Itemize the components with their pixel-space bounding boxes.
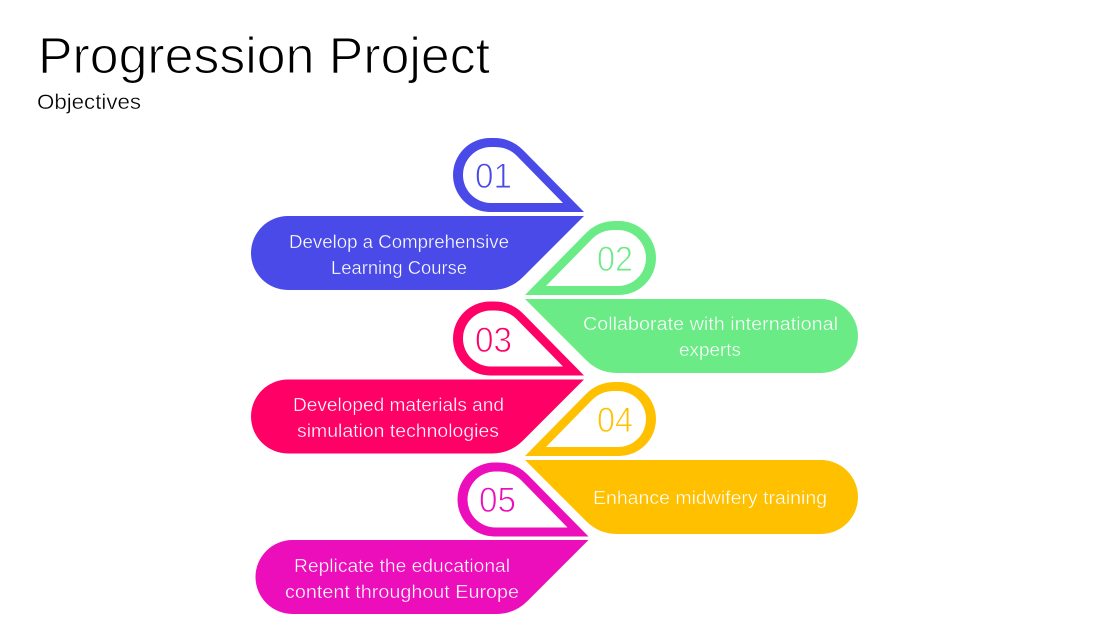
panel: objective 02 <box>525 221 858 373</box>
panel: objective 01 <box>251 138 584 290</box>
badge: 04 <box>525 382 656 456</box>
banner: replicate: Replicate the educational <box>294 555 510 576</box>
panel: objective 03 <box>251 302 584 454</box>
banner: midwifery <box>525 460 858 534</box>
banner: materials: simulation technologies <box>297 420 499 441</box>
banner: midwifery: Enhance midwifery training <box>593 487 827 508</box>
banner: materials <box>251 380 584 454</box>
banner: materials: Developed materials and <box>293 394 504 415</box>
banner: collaborate <box>525 299 858 373</box>
banner: collaborate: Collaborate with international <box>583 313 838 334</box>
banner: develop course <box>251 216 584 290</box>
badge: 02 <box>525 221 656 295</box>
subtitle: Objectives <box>37 91 141 114</box>
banner: collaborate: experts <box>679 339 741 360</box>
panel: objective 05 <box>256 462 588 614</box>
badge: 04: 04 <box>597 401 633 440</box>
banner: replicate: content throughout Europe <box>285 581 519 602</box>
badge: 01: 01 <box>475 157 512 196</box>
badge: 05 <box>458 462 588 536</box>
badge: 02: 02 <box>597 240 633 279</box>
title: Progression Project <box>38 27 490 84</box>
panel: objective 04 <box>525 382 858 534</box>
badge: 03 <box>453 302 584 376</box>
badge: 05: 05 <box>479 481 516 520</box>
badge: 01 <box>453 138 584 212</box>
banner: replicate <box>256 540 588 614</box>
badge: 03: 03 <box>475 321 512 360</box>
banner: develop course: Develop a Comprehensive <box>289 231 509 252</box>
banner: develop course: Learning Course <box>331 257 467 278</box>
